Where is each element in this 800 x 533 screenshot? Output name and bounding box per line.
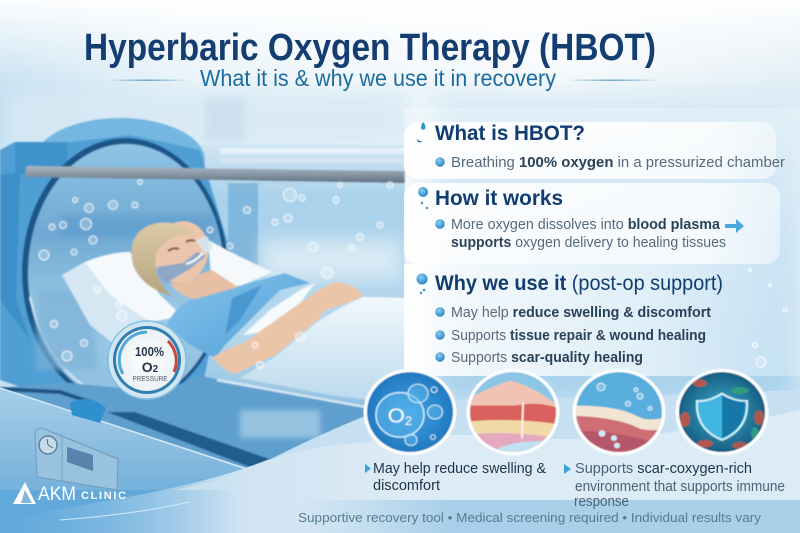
chamber tube [200, 145, 405, 415]
gauge: 100% O2 pressure: O2 [142, 359, 159, 375]
control panel [35, 428, 118, 490]
heading: What is HBOT? [435, 122, 585, 145]
gauge: 100% O2 pressure: 100% [135, 345, 164, 359]
bullet text: More oxygen dissolves into blood plasma [451, 217, 721, 233]
footer disclaimer: Supportive recovery tool • Medical screening required • Individual results vary [298, 510, 762, 525]
caption: swelling: May help reduce swelling & [373, 461, 546, 477]
caption: swelling [365, 461, 546, 494]
bullet text: supports oxygen delivery to healing tissues [451, 235, 726, 251]
bullet list: Supports scar-quality healing [451, 350, 643, 366]
caption: scar and immune [564, 461, 785, 510]
bullet text [435, 217, 726, 251]
circle: scar tissue [572, 369, 666, 457]
circle: oxygen bubbles: O [388, 404, 405, 427]
logo: AKM clinic [13, 482, 126, 505]
heading: Why we use it (post-op support) [435, 272, 723, 295]
gauge: 100% O2 pressure [108, 321, 186, 399]
circle: immune shield [676, 369, 768, 455]
subtitle: What it is & why we use it in recovery [200, 65, 556, 91]
bullet list: May help reduce swelling & discomfort [451, 305, 711, 321]
arrow [725, 219, 744, 233]
right panel: why we use it [404, 264, 800, 376]
icon: bubble [416, 274, 428, 294]
hyperbaric chamber illustration [0, 118, 405, 470]
caption: swelling: discomfort [373, 478, 440, 494]
bed and pillow [62, 240, 272, 345]
circle: oxygen bubbles [364, 369, 456, 455]
patient [131, 214, 315, 358]
patient arm [213, 282, 363, 374]
circle: skin wound [466, 369, 560, 457]
decorative side bubbles [748, 268, 787, 367]
bullet list: Supports tissue repair & wound healing [451, 328, 706, 344]
gauge: 100% O2 pressure: PRESSURE [132, 374, 168, 383]
title: Hyperbaric Oxygen Therapy (HBOT) [84, 27, 656, 69]
support rod [26, 166, 405, 183]
heading: How it works [435, 187, 563, 210]
bottom wave [0, 390, 800, 533]
logo: AKM clinic: AKM [38, 484, 76, 505]
bullet text: Breathing 100% oxygen in a pressurized chamber [451, 155, 785, 171]
right panel: how it works [404, 183, 780, 264]
logo: AKM clinic: CLINIC [81, 490, 126, 502]
caption: scar and immune: Supports scar-coxygen-rich [575, 461, 752, 477]
circle: oxygen bubbles: 2 [405, 414, 412, 428]
blanket [240, 297, 405, 405]
icon: bubble [418, 187, 428, 209]
caption: scar and immune: environment that supports immune [575, 479, 785, 495]
bullet list [435, 305, 711, 366]
caption: scar and immune: response [574, 494, 629, 510]
chamber end ring [0, 118, 230, 406]
icon: droplet [417, 122, 425, 142]
chamber sill [0, 376, 405, 470]
oxygen bubbles [39, 180, 393, 368]
machine base [0, 388, 420, 533]
right panel: what is HBOT [404, 108, 800, 376]
